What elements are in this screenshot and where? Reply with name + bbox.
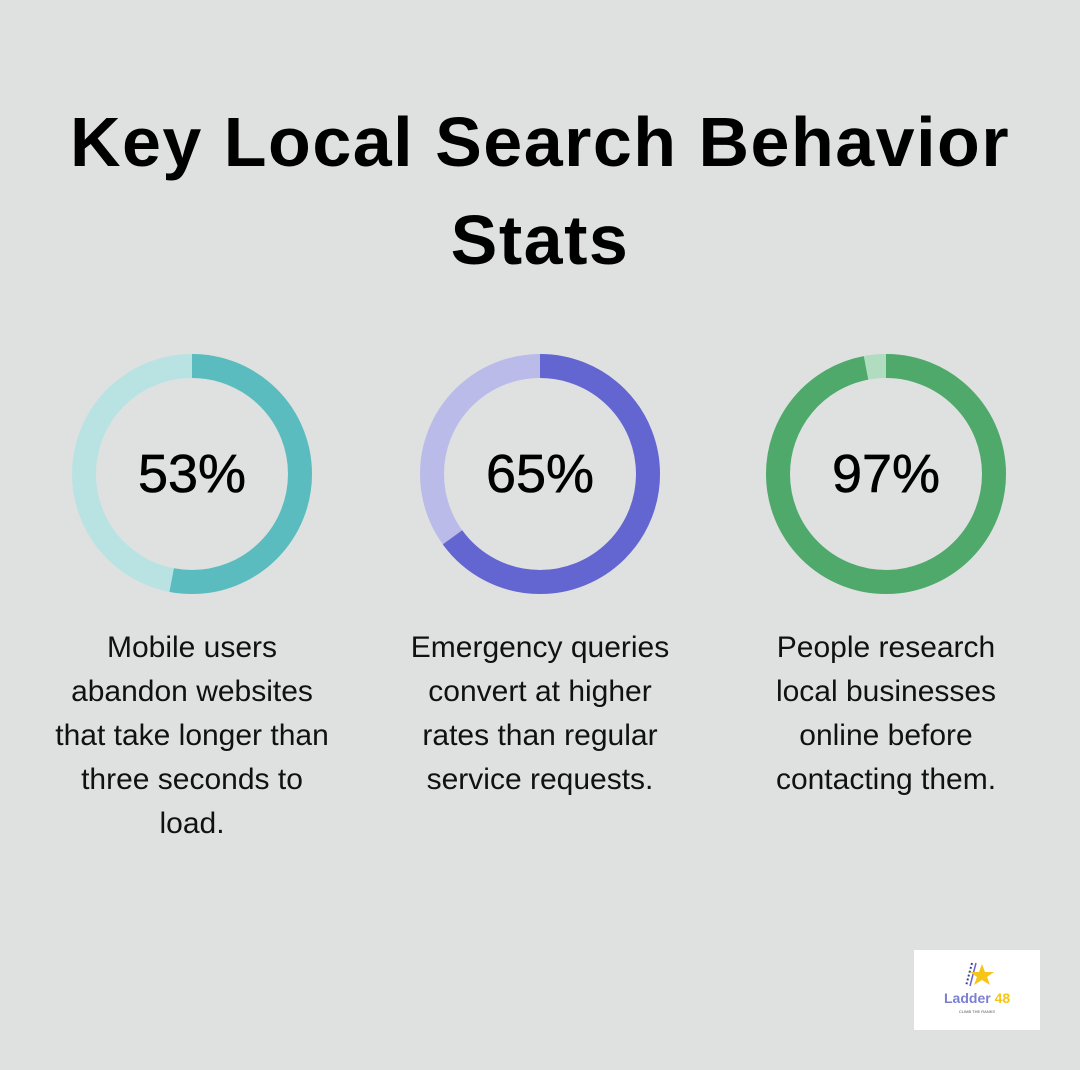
title: Key Local Search Behavior	[70, 103, 1010, 181]
text: 65%: convert at higher	[428, 675, 652, 708]
logo	[914, 950, 1040, 1030]
text: 53%: Mobile users	[107, 631, 277, 664]
donut charts	[72, 354, 1006, 594]
donut: 65%	[432, 366, 648, 582]
value: 97%: 97%	[832, 444, 940, 504]
text: 97%: People research	[777, 631, 995, 664]
text: 65%: rates than regular	[422, 719, 658, 752]
title	[70, 103, 1010, 279]
text: 65%	[411, 631, 669, 796]
text: 53%: load.	[159, 807, 225, 840]
text: 53%: three seconds to	[81, 763, 303, 796]
title: Stats	[451, 201, 629, 279]
logo text: Ladder 48	[944, 990, 1010, 1006]
text: 53%: abandon websites	[71, 675, 313, 708]
logo: CLIMB THE RANKS	[959, 1009, 995, 1014]
donut: 97%	[778, 366, 994, 582]
text: 65%: service requests.	[427, 763, 653, 796]
text: 97%: online before	[799, 719, 973, 752]
text: 97%: contacting them.	[776, 763, 996, 796]
value: 53%: 53%	[138, 444, 246, 504]
text: 53%: that take longer than	[55, 719, 329, 752]
icon: ladder star	[966, 963, 994, 986]
donut: 53%	[84, 366, 300, 582]
value: 65%: 65%	[486, 444, 594, 504]
text: 97%: local businesses	[776, 675, 996, 708]
text: 53%	[55, 631, 329, 840]
text: 65%: Emergency queries	[411, 631, 669, 664]
text: 97%	[776, 631, 996, 796]
